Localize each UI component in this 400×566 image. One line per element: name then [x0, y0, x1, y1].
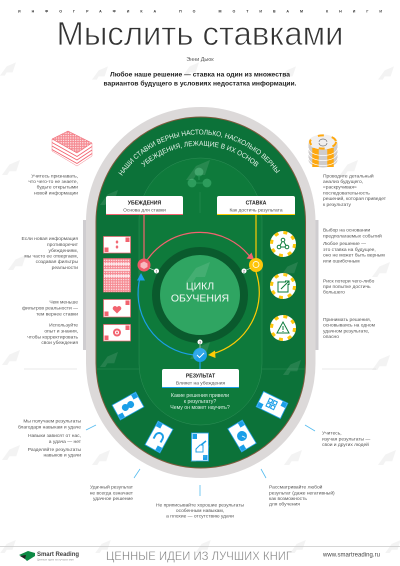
text: good result: удачное решение — [93, 497, 133, 502]
text: attribution: особенным навыкам, — [176, 508, 224, 514]
panel: poker table — [83, 107, 318, 478]
text: result notes left: Разделяйте результаты — [28, 446, 81, 453]
text: bet notes: опасно — [323, 335, 339, 340]
chip: growth — [270, 273, 296, 299]
header: book label: ИНФОГРАФИКА ПО МОТИВАМ КНИГИ — [18, 10, 382, 14]
arrow: result to beliefs — [137, 273, 200, 369]
arrow: beliefs to bet — [144, 215, 254, 265]
table outer rim — [86, 107, 316, 478]
red card: target — [104, 324, 130, 341]
text: beliefs notes: Учитесь признавать, — [31, 173, 78, 179]
learning cycle core: ЦИКЛ — [186, 280, 214, 292]
learning cycle core — [152, 247, 248, 343]
node: bet — [242, 258, 263, 274]
text: beliefs notes: реальности — [52, 266, 78, 271]
text: bet notes: анализ будущего, — [323, 179, 363, 185]
label: bet: Как достичь результата — [229, 207, 283, 213]
node: bet: 2 — [243, 270, 245, 274]
text: bet notes: при попытке достичь — [323, 285, 371, 290]
text: negative result: для обучения — [269, 502, 300, 508]
text: bet notes: Выбор на основании — [323, 228, 370, 234]
label: bet: СТАВКА — [246, 200, 267, 206]
inner felt area — [139, 158, 262, 425]
text: beliefs notes: Чем меньше — [49, 300, 78, 306]
text: result notes left: Навыки зависят от нас, — [28, 433, 81, 439]
label: result: РЕЗУЛЬТАТ — [186, 374, 216, 380]
text: negative result — [269, 483, 335, 508]
table felt — [96, 117, 306, 468]
result questions: Чему он может научить? — [170, 405, 230, 411]
footer slogan: ЦЕННЫЕ ИДЕИ ИЗ ЛУЧШИХ КНИГ — [106, 551, 293, 563]
text: beliefs notes: создавая фильтры — [36, 259, 78, 265]
text: result notes left: навыков и удачи — [43, 454, 81, 459]
text: bet notes: Любое решение — — [323, 241, 366, 247]
text: bet notes: большего — [323, 290, 345, 296]
result questions — [170, 393, 230, 411]
text: bet notes: это ставка на будущее, — [323, 247, 376, 253]
illustration: chip stack — [308, 134, 338, 168]
text: bet notes: решений, которая приведет — [323, 195, 387, 202]
subtitle — [104, 70, 297, 88]
footer logo: Smart Reading — [37, 552, 79, 558]
text: result notes right: изучая результаты — — [322, 437, 370, 442]
dividers — [24, 368, 376, 370]
subtitle: Любое наше решение — ставка на один из множества — [110, 70, 291, 78]
pointers: result ticks — [86, 425, 315, 496]
text: result notes left: благодаря навыкам и удаче — [18, 425, 81, 431]
text: result notes left: Мы получаем результаты — [23, 419, 81, 425]
text: bet notes: Принимать решения, — [323, 317, 371, 323]
text: result notes left — [18, 419, 82, 459]
result questions: Какие решения привели — [171, 393, 229, 399]
author: Энни Дьюк — [186, 57, 214, 63]
text: beliefs notes: что чего-то не знаете, — [28, 180, 78, 185]
felt dividers — [97, 192, 305, 369]
footer logo — [19, 551, 79, 562]
text: beliefs notes: мы часто ее отвергаем, — [24, 255, 78, 260]
text: result notes right: свои и других людей — [322, 441, 369, 448]
text: bet notes: предполагаемых событий — [323, 232, 382, 239]
red card: back pattern — [104, 258, 130, 292]
curved heading: НАШИ СТАВКИ ВЕРНЫ НАСТОЛЬКО, НАСКОЛЬКО ВЕРНЫ — [118, 130, 280, 176]
title: Мыслить ставками — [56, 15, 344, 52]
text: bet notes: к результату — [323, 203, 351, 208]
text: bet notes — [323, 172, 387, 340]
blue card: grid — [256, 391, 288, 419]
watermark on felt — [100, 160, 301, 462]
arrow: bet to result — [208, 215, 259, 358]
chip: network — [270, 231, 296, 257]
result questions: к результату? — [184, 399, 216, 405]
text: result notes right — [322, 430, 370, 448]
label: bet — [217, 196, 295, 215]
text: beliefs notes: новой информации — [34, 189, 78, 196]
node: beliefs: 1 — [156, 270, 158, 274]
text: beliefs notes: тем вернее ставки — [36, 312, 78, 317]
chip: warning — [270, 315, 296, 341]
text: bet notes: или ошибочным — [323, 258, 360, 264]
blue card: gauge — [228, 420, 256, 452]
text: bet notes: последовательность — [323, 191, 370, 196]
text: bet notes: «раскручивая» — [323, 186, 357, 191]
text: good result — [90, 483, 134, 502]
text: result notes left: а удача — нет — [49, 440, 82, 445]
text: bet notes: оно не может быть верным — [323, 253, 385, 259]
text: beliefs notes: Если новая информация — [22, 236, 78, 242]
text: beliefs notes: свои убеждения — [41, 340, 78, 346]
text: bet notes: удачном результате, — [323, 329, 369, 334]
label: beliefs — [106, 196, 183, 215]
text: bet notes: Риск потери чего-либо — [323, 278, 375, 284]
illustration: card deck — [52, 131, 92, 166]
text: result notes right: Учитесь, — [322, 430, 342, 436]
text: negative result: Рассматривайте любой — [269, 483, 323, 490]
red card: diamonds — [104, 236, 130, 253]
text: beliefs notes: фильтров реальности — — [22, 305, 78, 311]
text: beliefs notes: Используйте — [49, 322, 78, 329]
blue card: magnet — [145, 421, 173, 453]
footer logo: Ценные идеи из лучших книг — [37, 558, 74, 562]
red card: heart — [104, 300, 130, 317]
text: attribution: Не приписывайте хорошие результаты — [156, 502, 244, 509]
node: result: 3 — [199, 340, 201, 344]
icon: network — [188, 168, 211, 187]
learning cycle core: ОБУЧЕНИЯ — [171, 293, 229, 305]
footer line — [0, 546, 400, 548]
blue card: hand — [192, 433, 208, 461]
subtitle: вариантов будущего в условиях недостатка информации. — [104, 80, 297, 88]
label: result: Влияет на убеждения — [176, 380, 225, 386]
text: attribution: а плохие — отсутствию удачи — [166, 515, 234, 520]
blue card: clover — [112, 392, 144, 420]
text: beliefs notes: убеждениям, — [48, 248, 78, 254]
text: good result: Удачный результат — [90, 483, 134, 490]
node: result — [193, 340, 207, 362]
text: beliefs notes: будьте открытыми — [37, 185, 78, 191]
node: beliefs — [138, 258, 159, 274]
text: negative result: результат (даже негативный) — [269, 489, 335, 496]
table side rails — [83, 220, 318, 350]
text: bet notes: Проводите детальный — [323, 172, 374, 179]
text: beliefs notes — [22, 173, 79, 346]
label: result — [162, 369, 239, 388]
text: beliefs notes: противоречит — [47, 243, 79, 248]
text: beliefs notes: чтобы корректировать — [27, 334, 78, 340]
text: bet notes: основываясь на одном — [323, 324, 376, 329]
text: negative result: как возможность — [269, 497, 307, 502]
text: beliefs notes: опыт и знания, — [44, 329, 78, 334]
footer url: www.smartreading.ru — [322, 552, 380, 558]
label: beliefs: УБЕЖДЕНИЯ — [128, 200, 162, 206]
label: beliefs: Основа для ставки — [123, 207, 166, 213]
text: good result: не всегда означает — [90, 491, 134, 496]
text: attribution — [156, 502, 244, 520]
